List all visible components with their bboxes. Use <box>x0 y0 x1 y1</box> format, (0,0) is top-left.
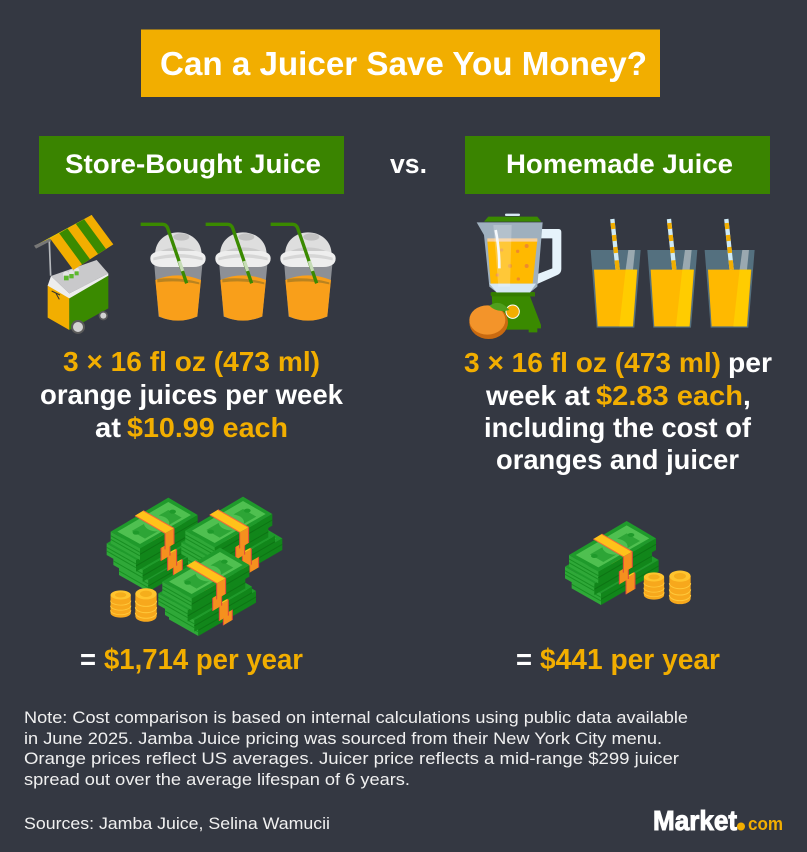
icon: large money piles with coins <box>107 497 282 636</box>
total: store-bought cost: $1,714 per year <box>104 644 303 676</box>
total: homemade cost: = <box>516 644 532 676</box>
total: homemade cost: $441 per year <box>540 644 720 676</box>
text: homemade details: week at <box>485 380 590 411</box>
text: homemade details: , <box>743 380 751 411</box>
text: store-bought details: orange juices per week <box>40 379 343 410</box>
heading: store-bought juice: Store-Bought Juice <box>65 149 321 179</box>
icon: takeaway juice cups <box>141 224 336 321</box>
text: homemade details: including the cost of <box>484 412 752 443</box>
text: homemade details: per <box>728 347 772 378</box>
text: homemade details: $2.83 each <box>596 380 743 411</box>
text: store-bought details: 3 × 16 fl oz (473 ml) <box>63 346 320 377</box>
title: Can a Juicer Save You Money? <box>160 45 647 82</box>
sources: Sources: Jamba Juice, Selina Wamucii <box>24 815 330 833</box>
heading: homemade juice: Homemade Juice <box>506 149 733 179</box>
title <box>141 30 660 97</box>
text: homemade details: 3 × 16 fl oz (473 ml) <box>464 347 721 378</box>
note text: Note: Cost comparison is based on internal calculations using public data available <box>24 709 688 727</box>
note text: Orange prices reflect US averages. Juicer price reflects a mid-range $299 juicer <box>24 750 680 768</box>
icon: blender with orange <box>469 214 561 339</box>
logo: Market.com: Market <box>653 805 737 836</box>
heading: homemade juice <box>465 136 770 194</box>
icon: small money pile with coins <box>565 521 691 605</box>
text: store-bought details: $10.99 each <box>127 412 288 443</box>
text: store-bought details <box>40 346 343 443</box>
total: store-bought cost: = <box>80 644 96 676</box>
text: store-bought details: at <box>95 412 121 443</box>
icon: juice cart <box>34 215 113 334</box>
note text: spread out over the average lifespan of 6 years. <box>24 771 410 789</box>
text: homemade details: oranges and juicer <box>496 444 739 475</box>
logo: Market.com: com <box>748 814 783 834</box>
logo: Market.com <box>653 805 783 836</box>
note text <box>24 709 688 789</box>
heading: vs.: vs. <box>390 149 427 179</box>
text: homemade details <box>464 347 772 475</box>
icon: juice glasses <box>591 219 755 328</box>
note text: in June 2025. Jamba Juice pricing was sourced from their New York City menu. <box>24 730 662 748</box>
heading: store-bought juice <box>39 136 344 194</box>
